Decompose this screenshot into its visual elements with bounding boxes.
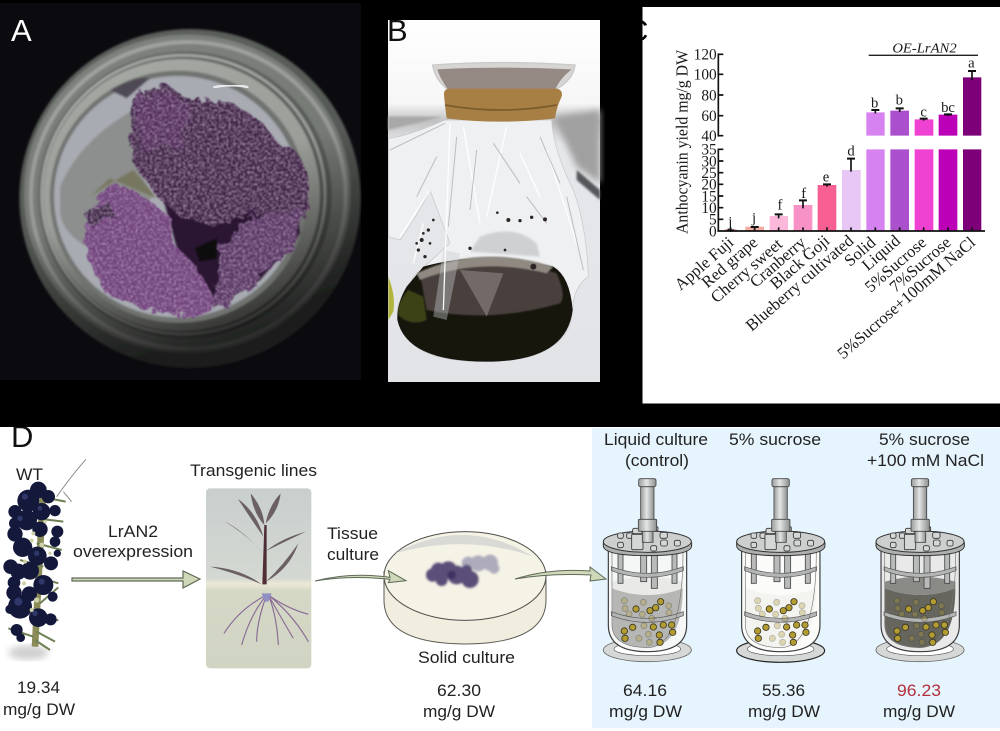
callus base xyxy=(160,160,300,307)
panel letter B: B xyxy=(387,13,408,48)
label transgenic lines: Transgenic lines xyxy=(190,461,317,480)
y-axis tick labels: 10 xyxy=(701,200,717,217)
y-axis tick labels: 30 xyxy=(701,153,717,170)
condition labels xyxy=(604,430,984,470)
y-axis tick labels xyxy=(694,46,717,240)
x-axis category labels: 7%Sucrose xyxy=(886,233,955,296)
panel D: production workflow xyxy=(0,419,1000,731)
yield values: mg/g DW xyxy=(748,702,820,721)
group label: OE-LrAN2 xyxy=(869,41,978,56)
significance letters: bc xyxy=(941,100,955,116)
condition labels: (control) xyxy=(625,451,689,470)
yield values: 64.16 xyxy=(623,681,667,700)
significance letters: j xyxy=(751,211,756,227)
blue background of liquid culture section xyxy=(592,428,1000,728)
yield values: 55.36 xyxy=(762,681,805,700)
panel letter A: A xyxy=(11,13,32,48)
label solid culture: Solid culture xyxy=(418,648,515,667)
panel B: flask with dark liquid culture xyxy=(387,13,600,382)
y-axis tick labels: 35 xyxy=(701,142,717,159)
solid culture yield: mg/g DW xyxy=(423,702,495,721)
significance letters: f xyxy=(778,197,783,213)
error bars xyxy=(727,71,976,232)
y-axis tick labels: 120 xyxy=(694,46,717,63)
yield values xyxy=(609,681,955,721)
group label: OE-LrAN2: OE-LrAN2 xyxy=(892,41,957,56)
panel letter C: C xyxy=(626,13,648,48)
x-axis category labels: Blueberry cultivated xyxy=(742,231,858,335)
y-axis tick labels: 60 xyxy=(701,108,717,125)
x-axis category labels: Red grape xyxy=(698,233,761,292)
y-axis tick labels: 15 xyxy=(701,188,717,205)
y-axis tick labels: 40 xyxy=(701,128,717,145)
y-axis tick labels: 80 xyxy=(701,87,717,104)
significance letters: a xyxy=(968,56,975,72)
significance letters: j xyxy=(727,215,732,231)
WT yield xyxy=(3,678,75,719)
y-axis tick labels: 20 xyxy=(701,177,717,194)
arrow label: overexpression xyxy=(73,542,193,561)
condition labels: 5% sucrose xyxy=(879,430,970,449)
label tissue culture: culture xyxy=(327,545,379,564)
y-axis tick labels: 25 xyxy=(701,165,717,182)
significance letters xyxy=(727,56,975,231)
label tissue culture: Tissue xyxy=(327,524,378,543)
x-axis category labels: 5%Sucrose xyxy=(861,233,930,296)
significance letters: b xyxy=(871,95,878,111)
solid culture yield: 62.30 xyxy=(437,681,481,700)
WT plant with black goji berries xyxy=(3,459,86,660)
petri dish xyxy=(315,532,546,644)
tissue clumps xyxy=(426,555,499,588)
significance letters: b xyxy=(896,93,903,109)
panel C: anthocyanin yield bar chart xyxy=(626,7,1000,404)
label WT: WT xyxy=(16,465,43,484)
x-axis category labels: Black Goji xyxy=(766,231,834,293)
curved arrow to tissue in dish xyxy=(315,571,406,583)
bioreactor: 5% sucrose xyxy=(737,479,825,662)
significance letters: d xyxy=(847,143,855,159)
bioreactor: 5% sucrose + NaCl xyxy=(876,479,964,662)
arrow: overexpression xyxy=(72,571,200,588)
x-axis category labels: Liquid xyxy=(858,231,904,274)
y-axis title: Anthocyanin yield mg/g DW xyxy=(672,50,691,234)
condition labels: Liquid culture xyxy=(604,430,708,449)
x-axis category labels: Cherry sweet xyxy=(707,234,786,307)
yield values: mg/g DW xyxy=(609,702,682,721)
WT yield: mg/g DW xyxy=(3,700,75,719)
y-axis tick labels: 5 xyxy=(709,212,717,229)
solid culture yield xyxy=(423,681,495,721)
bars xyxy=(725,77,981,231)
label tissue culture xyxy=(327,524,379,564)
x-axis category labels: Cranberry xyxy=(746,232,810,291)
significance letters: f xyxy=(801,186,806,202)
curved arrow: to bioreactors xyxy=(515,567,606,581)
arrow label xyxy=(73,522,193,561)
transgenic plant in tube xyxy=(206,488,311,668)
x-axis category labels: Solid xyxy=(840,232,880,270)
axes xyxy=(717,53,985,231)
panel A: purple callus in a glass jar xyxy=(0,3,361,380)
arrow label: LrAN2 xyxy=(108,522,158,541)
x-axis category labels xyxy=(671,231,979,363)
yield values: mg/g DW xyxy=(883,702,955,721)
yield values: 96.23 xyxy=(897,681,941,700)
significance letters: c xyxy=(920,105,927,121)
x-axis category labels: 5%Sucrose+100mM NaCl xyxy=(833,232,979,363)
y-axis tick labels: 100 xyxy=(694,67,717,84)
significance letters: e xyxy=(823,169,829,185)
panel letter D: D xyxy=(11,419,33,454)
y-axis tick labels: 0 xyxy=(709,223,717,240)
x-axis category labels: Apple Fuji xyxy=(671,232,738,294)
WT yield: 19.34 xyxy=(17,678,60,697)
condition labels: +100 mM NaCl xyxy=(867,451,984,470)
bioreactor: control xyxy=(603,479,692,662)
condition labels: 5% sucrose xyxy=(729,430,821,449)
